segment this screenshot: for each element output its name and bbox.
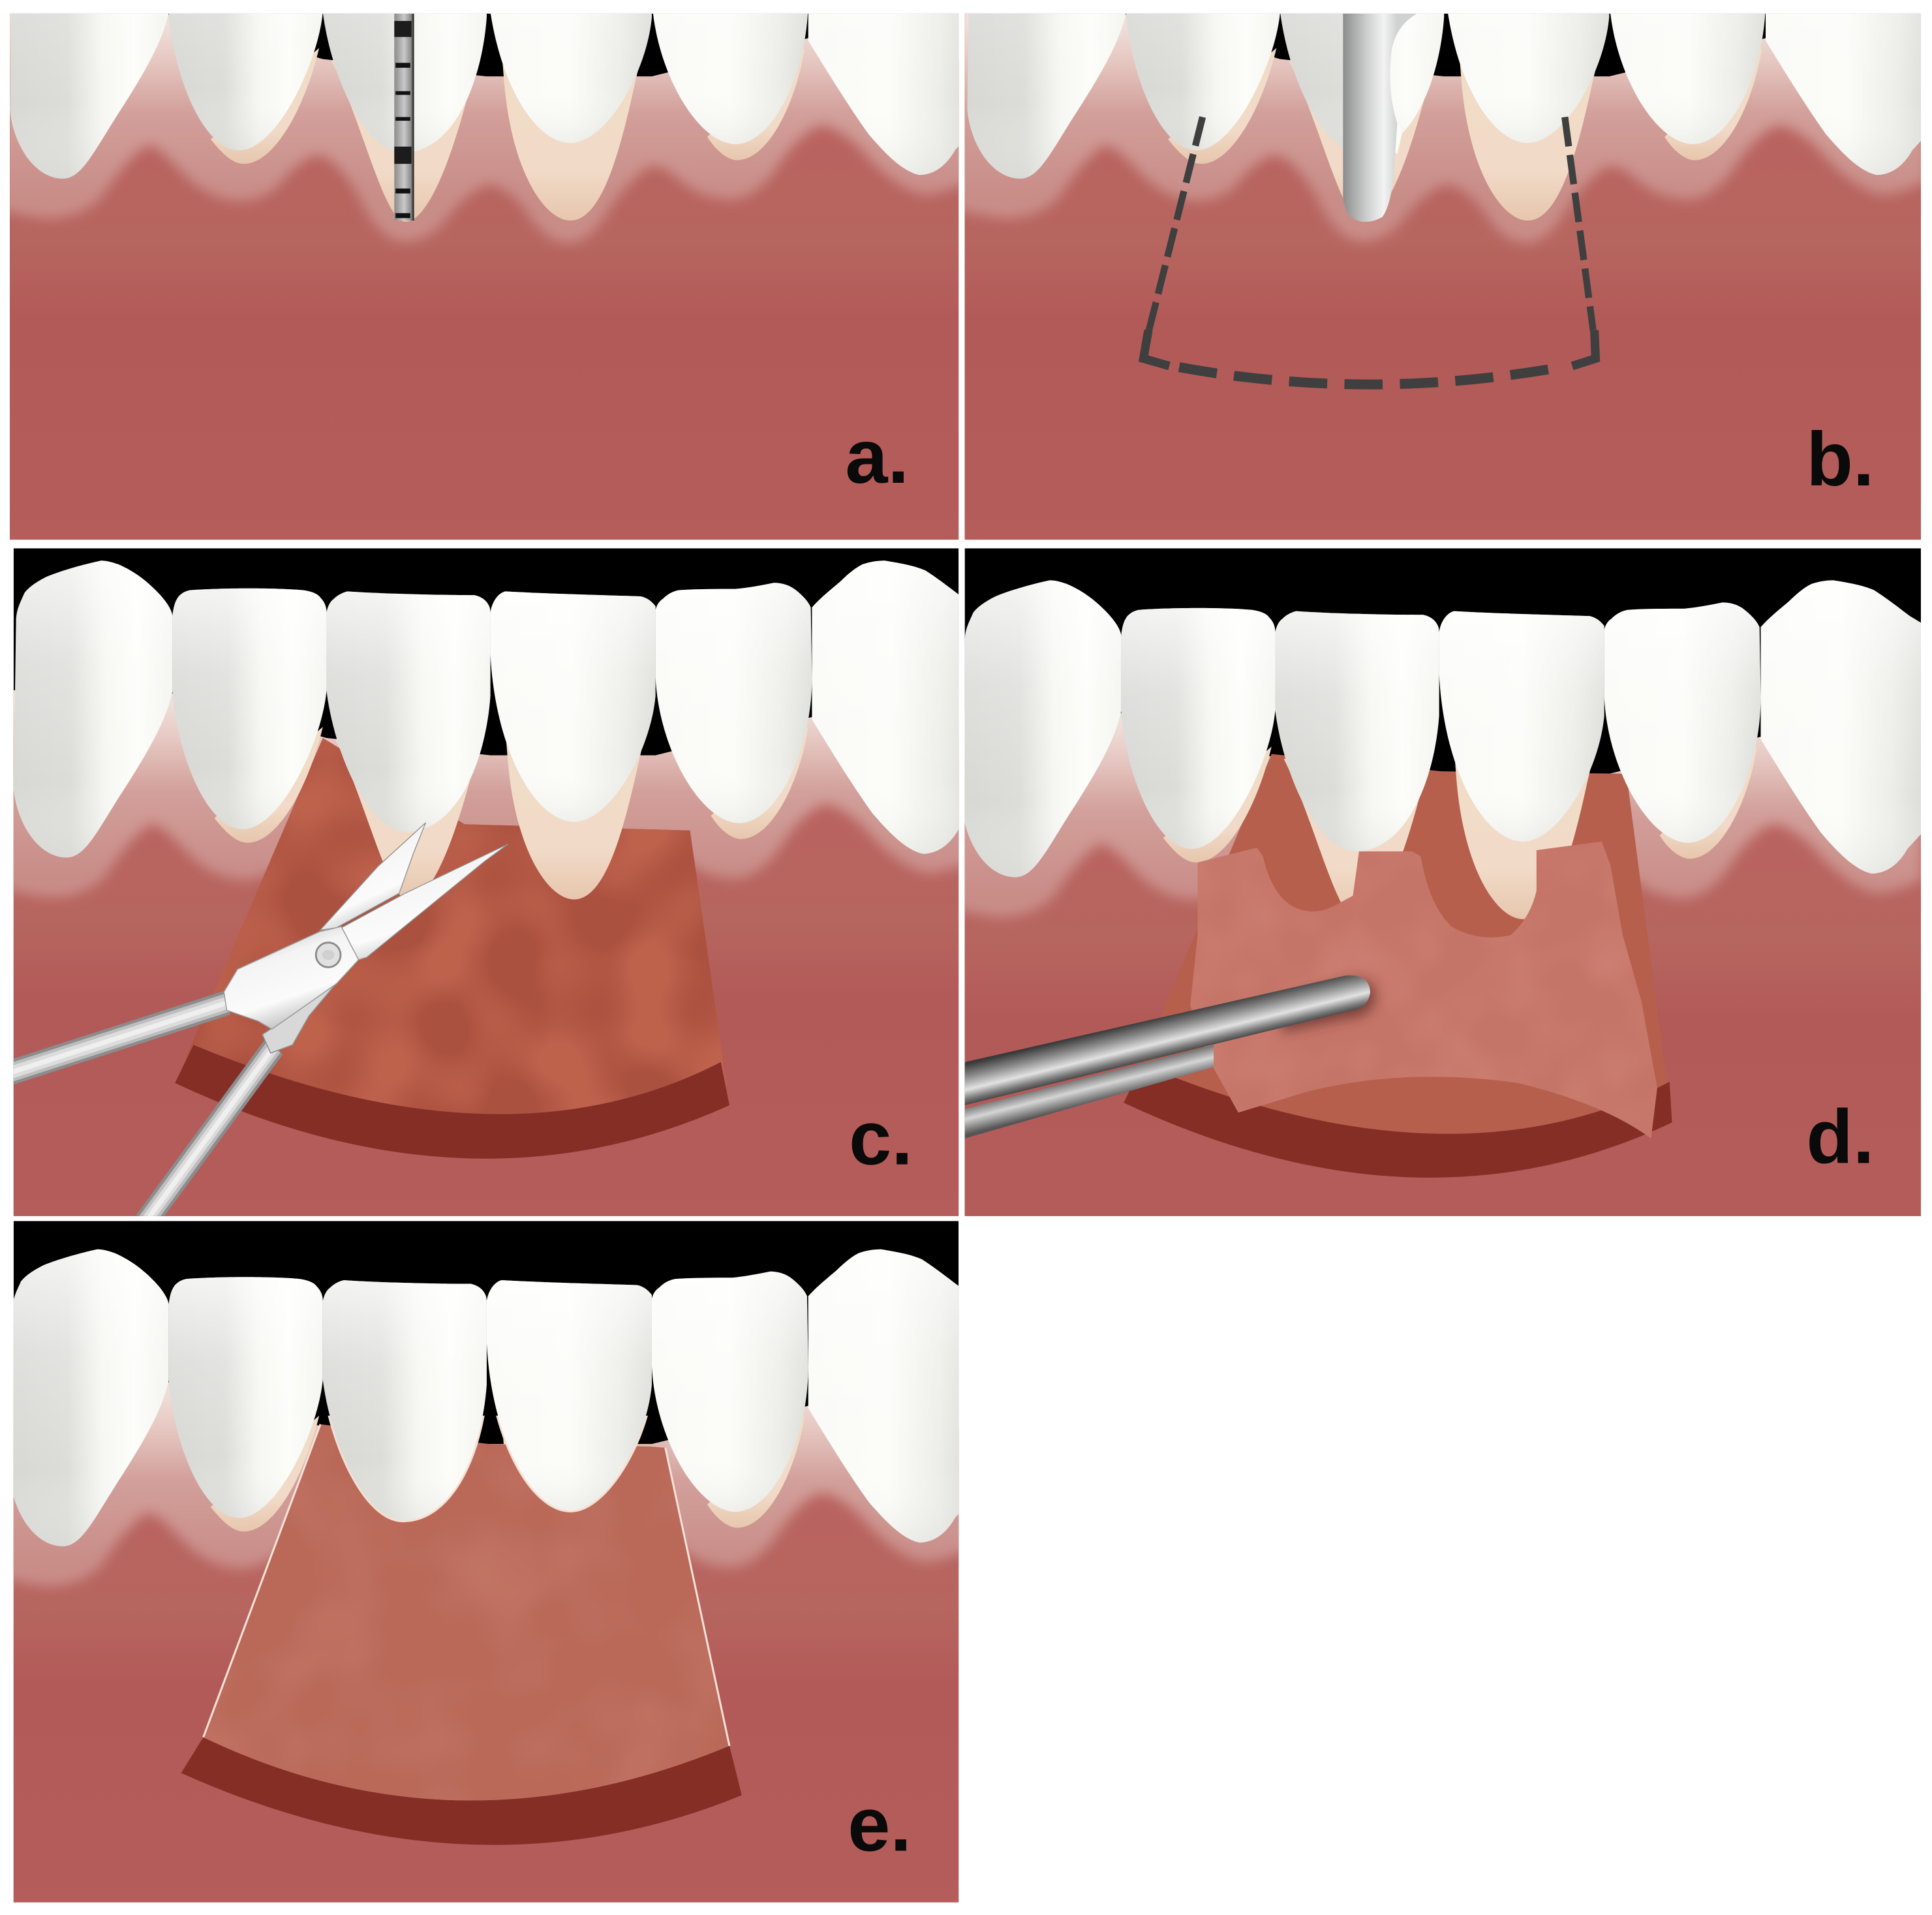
gum tissue d [949, 673, 1922, 1252]
panel: a, periodontal probing [0, 0, 970, 553]
connective tissue graft [1183, 838, 1663, 1146]
graft margin around teeth [323, 1280, 652, 1520]
scissor blades [320, 823, 508, 960]
recipient bed d [1124, 754, 1672, 1178]
exposed roots d [1163, 746, 1757, 921]
teeth b [967, 0, 1927, 179]
label b: b. [1806, 416, 1874, 502]
gum tissue e [0, 1341, 970, 1915]
exposed roots a [211, 48, 805, 222]
scissor upper handle [5, 1003, 226, 1075]
exposed roots b [1168, 48, 1762, 222]
recipient bed [172, 727, 739, 1219]
teeth e [10, 1249, 970, 1546]
gum tissue b [954, 0, 1927, 553]
exposed roots e [211, 1416, 805, 1589]
panel: e, graft sutured in place [0, 1221, 970, 1915]
dashed incision line [1143, 117, 1595, 384]
exposed roots c [215, 727, 808, 900]
label d: d. [1806, 1094, 1874, 1180]
label e: e. [848, 1781, 912, 1867]
icon: surgical blade [1343, 14, 1417, 222]
positioned graft [193, 1416, 748, 1860]
forceps lower jaw [965, 1045, 1214, 1139]
scissor joint [224, 927, 359, 1053]
gum tissue c [0, 653, 974, 1232]
icon: tissue forceps [965, 975, 1375, 1139]
teeth d [962, 580, 1922, 878]
scissor lower handle [146, 1047, 273, 1222]
forceps upper jaw [965, 975, 1370, 1105]
teeth c [14, 560, 974, 857]
panel: c, recipient bed preparation [0, 548, 974, 1232]
dark bed edge [181, 1738, 742, 1845]
gum tissue a [0, 0, 970, 553]
icon: periodontal probe [394, 14, 414, 221]
label c: c. [849, 1095, 913, 1180]
teeth a [10, 0, 970, 179]
panel: d, graft placement [949, 548, 1922, 1252]
icon: surgical scissors [5, 823, 508, 1222]
label a: a. [845, 414, 909, 499]
panel: b, incision outline [954, 0, 1927, 553]
